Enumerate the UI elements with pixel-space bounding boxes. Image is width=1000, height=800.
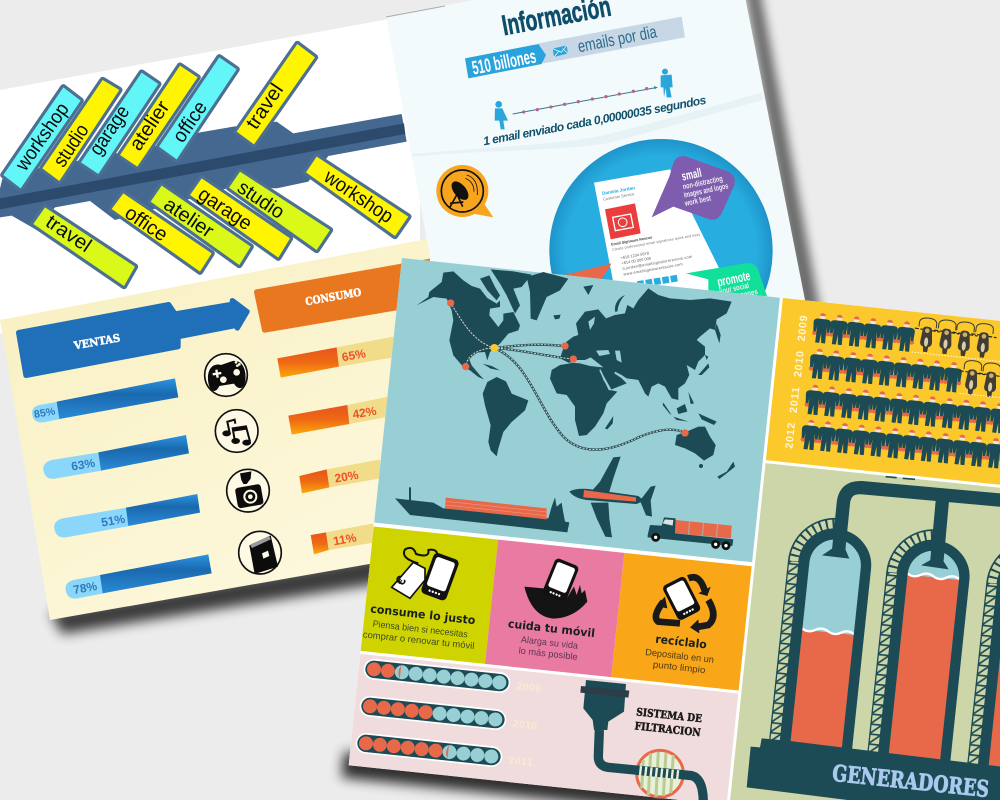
bar labels: workshop (319, 165, 397, 228)
signature card (594, 169, 722, 300)
heading: sistema de filtración: FILTRACION (634, 719, 702, 739)
map: americas and arctic (417, 269, 568, 456)
ventas bars: 85% (33, 405, 57, 421)
callout: small images: non-distracting (682, 174, 724, 191)
icon: recycled phone (656, 575, 713, 633)
consumo bars: 11% (332, 530, 358, 548)
signature card: Daniela Jordan (602, 185, 636, 196)
icon: hand holding phone (524, 557, 587, 619)
text: recíclalo (645, 632, 714, 675)
tile: consume lo justo (361, 527, 498, 664)
shadow of information sheet (745, 0, 820, 310)
panel: ventas y consumo (0, 238, 430, 620)
decorative fold band (412, 93, 763, 157)
icon: truck (648, 517, 733, 550)
shadow of sales sheet (50, 552, 400, 634)
signature card: Email Signature Rescue (611, 235, 653, 247)
workers and generators (747, 312, 1000, 800)
year labels: 2009 (516, 681, 542, 695)
icon: woman (495, 101, 508, 129)
bar labels: office (121, 202, 172, 246)
label bars lower (33, 157, 408, 286)
signature card: www.emailsignaturerescue.com (623, 261, 684, 277)
icon: camera (227, 469, 269, 512)
callout: red tail (560, 263, 612, 282)
text: consume lo justo: consume lo justo (370, 601, 476, 627)
text: consume lo justo (362, 601, 476, 651)
bar labels: garage (85, 102, 134, 159)
map routes and vehicles (395, 299, 733, 550)
arrow timeline (513, 86, 657, 114)
bar labels: studio (233, 177, 288, 224)
text: cuida tu móvil: Alarga su vida (520, 634, 579, 651)
callout: promote (686, 263, 768, 304)
year labels vertical: 2011 (788, 386, 802, 414)
ribbon: emails por dia: 510 billones (470, 47, 538, 80)
map panel (374, 258, 780, 562)
filter panel (349, 654, 738, 800)
ventas bars: 51% (100, 512, 126, 530)
consumo bars (277, 337, 393, 554)
pictogram row 2009 (811, 312, 1000, 362)
text: recíclalo: punto limpio (652, 659, 706, 675)
ventas bars: 63% (70, 456, 96, 474)
text: cuida tu móvil (507, 616, 596, 662)
ribbon: emails por dia: emails por dia (576, 21, 659, 56)
year labels vertical: 2009 (796, 315, 810, 342)
generator pipes (822, 477, 1000, 569)
bar labels: office (169, 97, 212, 147)
signature card: +618 1234 5678 (620, 250, 650, 260)
shipping routes (451, 303, 685, 450)
callout: small images (652, 156, 735, 220)
consumo bars: 20% (333, 468, 360, 486)
pill chart 2010 (362, 699, 503, 727)
icon: man (661, 69, 673, 97)
bar labels: travel (42, 211, 95, 257)
icon: ship (395, 487, 569, 532)
label bars upper (3, 44, 315, 188)
pictogram row 2010 (808, 348, 1000, 398)
map: europe asia africa oceania (550, 285, 735, 479)
signature card: d.jordan@emailsignaturerescue.com (622, 254, 693, 271)
consumo bars: 65% (341, 346, 367, 364)
panel: información email (386, 0, 805, 362)
year labels vertical (783, 315, 810, 449)
heading: sistema de filtración (634, 705, 703, 739)
callout: small images: small (680, 166, 703, 184)
generator tank 2 (868, 531, 969, 761)
generators panel (724, 463, 1000, 800)
ribbon: emails por dia (465, 17, 685, 80)
pill chart 2011 (358, 736, 499, 764)
icon: price tag and phone: € (392, 572, 409, 589)
icon: book (239, 531, 281, 574)
bar labels: atelier (125, 97, 174, 155)
year labels (508, 681, 542, 769)
caption: 1 email enviado cada 0,00000035 segundos (482, 93, 708, 148)
consumo header: CONSUMO (304, 286, 362, 308)
ventas arrow header (19, 301, 247, 375)
icon: price tag and phone (392, 548, 460, 602)
generator tank 3 (968, 541, 1000, 772)
workers panel (766, 298, 1000, 490)
bar labels: workshop (11, 99, 74, 176)
bar labels: garage (194, 183, 256, 235)
icon: game controller (205, 354, 247, 396)
fishbone spine (0, 114, 407, 230)
consumo header (257, 261, 430, 330)
text: consume lo justo: Piensa bien si necesitas (372, 619, 469, 640)
generator tank 1 (770, 519, 870, 750)
big blue circle (549, 139, 773, 362)
year labels: 2011 (508, 755, 533, 769)
signature card: Create professional email signatures quick and easy (612, 233, 701, 252)
signature card: +614 00 000 000 (621, 255, 652, 266)
year labels: 2010 (512, 719, 538, 732)
callout: small images: images and logos (683, 181, 729, 200)
shadow of main sheet (341, 752, 762, 800)
generator base (747, 738, 1000, 800)
panel: main sheet (343, 258, 1000, 800)
callout: small images: work best (683, 194, 712, 208)
bar labels: atelier (160, 194, 218, 243)
ventas arrow header: VENTAS (72, 331, 121, 352)
icon: music notes (215, 410, 258, 452)
route points (447, 299, 689, 437)
bar labels: travel (242, 80, 288, 133)
icon: satellite dish bubble (436, 165, 493, 217)
text: cuida tu móvil: cuida tu móvil (507, 616, 596, 640)
heading: sistema de filtración: SISTEMA DE (636, 705, 703, 725)
panel: office fishbone diagram (0, 13, 420, 333)
tile: cuida tu móvil (485, 540, 624, 677)
signature card: Customer Service (603, 191, 635, 202)
ventas bars: 78% (72, 579, 98, 597)
bar labels: studio (49, 120, 94, 171)
callout: promote: media pages (720, 287, 759, 304)
text: recíclalo: Depositalo en un (645, 647, 714, 665)
text: cuida tu móvil: lo más posible (518, 645, 578, 662)
tile: recíclalo (611, 553, 752, 691)
year labels vertical: 2012 (783, 422, 798, 449)
pictogram row 2011 (804, 384, 1000, 434)
filter pipe diagram (580, 680, 703, 800)
year labels vertical: 2010 (792, 350, 807, 378)
text: consume lo justo: comprar o renovar tu móvil (362, 629, 475, 651)
ventas bars (32, 378, 212, 599)
text: recíclalo: recíclalo (655, 632, 708, 652)
callout: promote: your social (719, 281, 750, 296)
pill chart 2009 (366, 662, 507, 690)
icon: plane (569, 457, 656, 537)
pictogram row 2012 (800, 419, 1000, 469)
callout: promote: promote (716, 268, 752, 290)
consumo bars: 42% (351, 404, 378, 422)
lower tiles and filter system (358, 548, 714, 800)
bar labels (11, 80, 397, 257)
